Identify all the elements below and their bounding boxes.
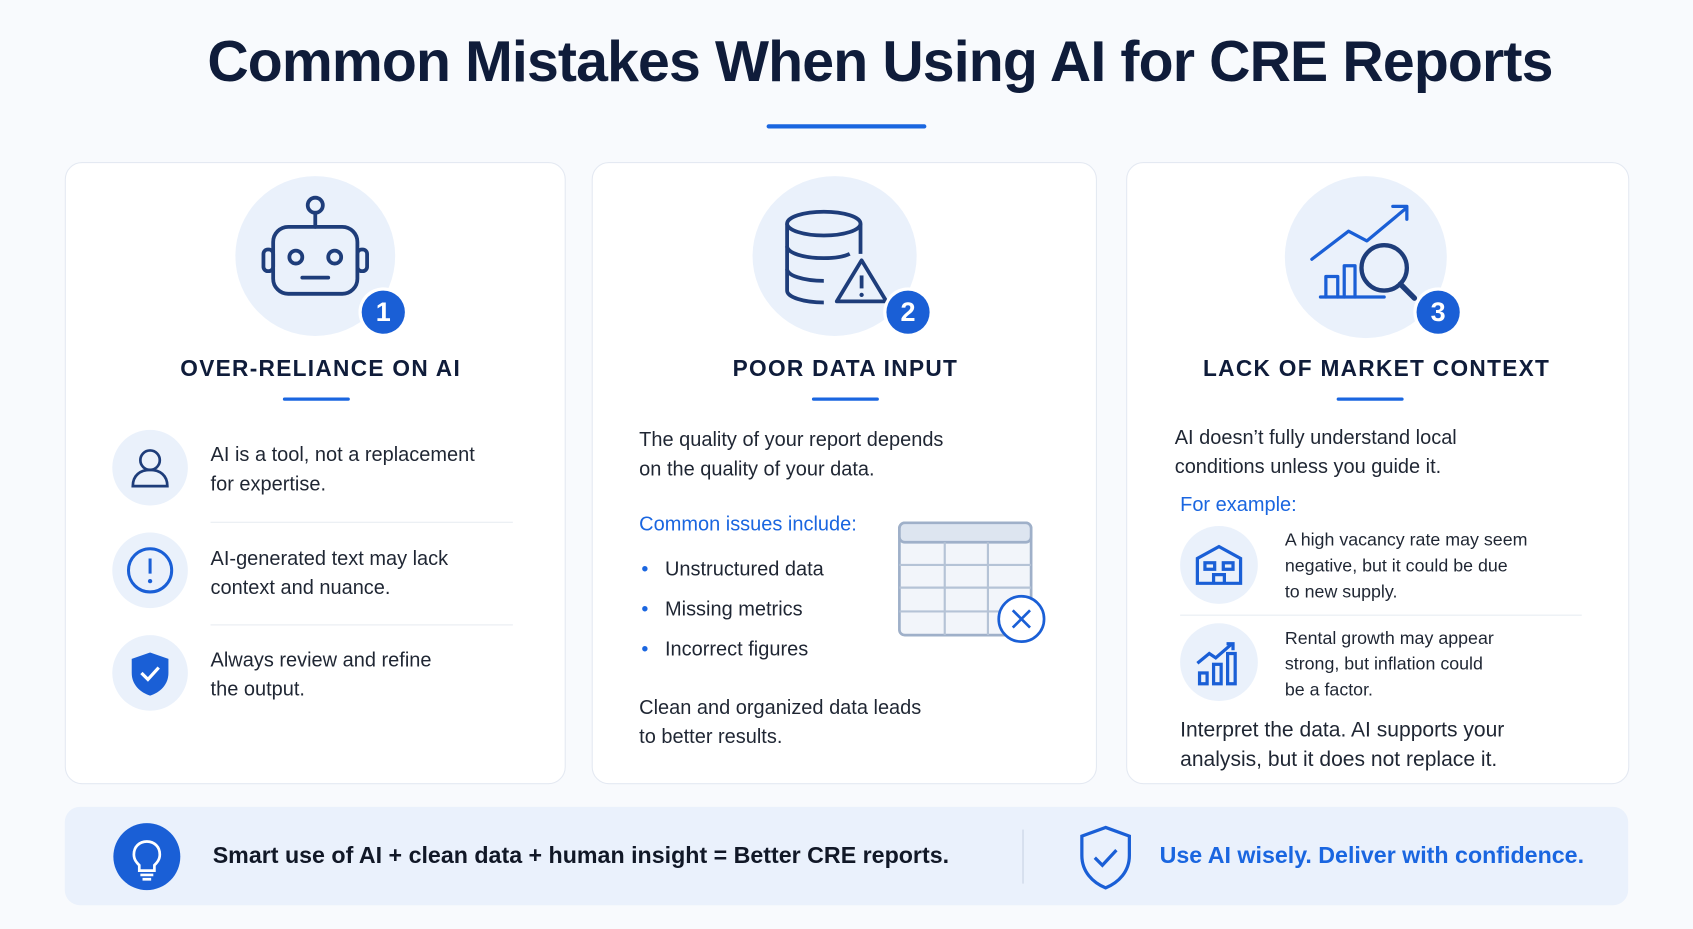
text: interpret: Interpret the data. AI supports your — [1180, 718, 1504, 742]
text: clean data — [639, 696, 921, 747]
text: rental growth: be a factor. — [1285, 681, 1373, 700]
icon: table with x — [898, 522, 1046, 643]
title: Common Mistakes When Using AI for CRE Reports — [207, 30, 1553, 94]
icon: building — [1180, 526, 1258, 604]
icon: growth chart — [1180, 623, 1258, 701]
heading: market context: LACK OF MARKET CONTEXT — [1203, 356, 1550, 381]
badge 2: 2 — [901, 297, 916, 327]
panel: market context — [1126, 162, 1629, 784]
text: intro: AI doesn’t fully understand local — [1175, 426, 1457, 448]
text: tagline: Use AI wisely. Deliver with confidence. — [1160, 843, 1584, 868]
text: item3: Always review and refine — [211, 648, 431, 671]
text: item3: the output. — [211, 677, 305, 700]
bullet list — [641, 557, 824, 660]
text: vacancy: negative, but it could be due — [1285, 556, 1508, 576]
text: clean data: Clean and organized data leads — [639, 696, 921, 718]
text: intro: on the quality of your data. — [639, 457, 875, 480]
text: common issues: Common issues include: — [639, 512, 857, 535]
text: intro: conditions unless you guide it. — [1175, 455, 1441, 477]
text: rental growth: Rental growth may appear — [1285, 629, 1494, 648]
bullet list: • Unstructured data — [641, 557, 824, 580]
badge 3 — [1417, 291, 1460, 334]
icon: bulb — [113, 823, 180, 890]
icon: shield check — [1080, 826, 1131, 890]
badge 1 — [362, 291, 405, 334]
text: clean data: to better results. — [639, 725, 782, 747]
title underline — [767, 124, 926, 129]
banner — [65, 807, 1628, 905]
bullet list: • Incorrect figures — [641, 637, 808, 660]
text: for example: For example: — [1180, 493, 1297, 515]
text: vacancy: to new supply. — [1285, 582, 1397, 602]
badge 1: 1 — [376, 297, 391, 327]
icon: database warning — [753, 176, 917, 336]
panel: over-reliance — [65, 162, 566, 784]
text: vacancy — [1284, 530, 1527, 602]
item: shield — [112, 635, 188, 711]
heading: poor data: POOR DATA INPUT — [733, 356, 958, 381]
text: item1: AI is a tool, not a replacement — [211, 443, 475, 466]
icon: robot — [235, 176, 395, 336]
text: formula: Smart use of AI + clean data + human insight = Better CRE reports. — [213, 843, 949, 868]
text: item1 — [210, 443, 475, 495]
text: intro — [1174, 426, 1457, 477]
text: item2: AI-generated text may lack — [211, 547, 448, 569]
item: person — [112, 430, 188, 506]
text: item2 — [210, 547, 448, 598]
text: rental growth: strong, but inflation could — [1285, 655, 1483, 674]
badge 2 — [886, 291, 930, 334]
badge 3: 3 — [1431, 297, 1446, 327]
bullet list: • Missing metrics — [641, 597, 803, 620]
text: item2: context and nuance. — [211, 576, 390, 598]
text: interpret — [1180, 718, 1504, 771]
panel: poor data — [592, 162, 1097, 784]
text: vacancy: A high vacancy rate may seem — [1285, 530, 1527, 550]
text: intro — [639, 428, 943, 480]
text: item3 — [210, 648, 431, 700]
heading: over-reliance: OVER-RELIANCE ON AI — [180, 356, 461, 381]
text: item1: for expertise. — [211, 472, 326, 495]
text: intro: The quality of your report depends — [639, 428, 943, 450]
text: interpret: analysis, but it does not replace it. — [1180, 747, 1497, 771]
icon: chart magnifier — [1285, 176, 1447, 338]
text: rental growth — [1285, 629, 1494, 700]
item: alert — [112, 533, 188, 608]
